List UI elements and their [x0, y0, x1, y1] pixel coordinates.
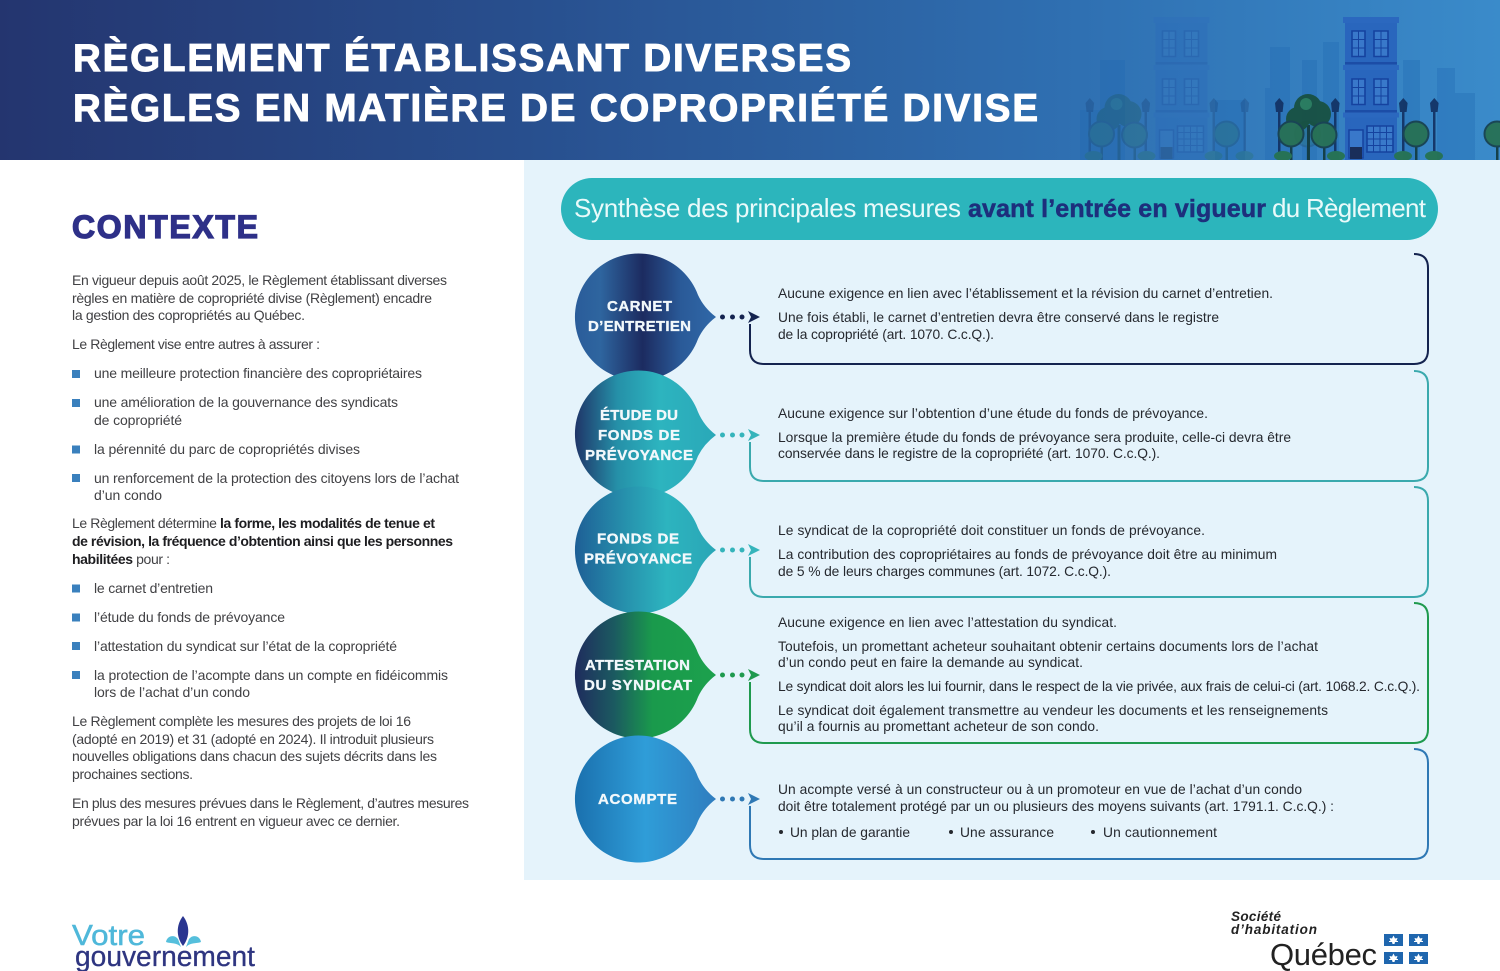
list: documents: l’attestation du syndicat sur l’état de la copropriété — [94, 638, 397, 654]
text: acompte: Un plan de garantie — [790, 825, 910, 840]
list: objectifs — [72, 365, 459, 503]
title: RÈGLEMENT ÉTABLISSANT DIVERSES — [73, 36, 851, 80]
text: carnet d'entretien: de la copropriété (art. 1070. C.c.Q.). — [778, 327, 994, 342]
text: attestation du syndicat: d’un condo peut en faire la demande au syndicat. — [778, 655, 1083, 670]
text: carnet d'entretien: Une fois établi, le carnet d’entretien devra être conservé dans le registre — [778, 310, 1219, 325]
text: attestation du syndicat: Aucune exigence en lien avec l’attestation du syndicat. — [778, 615, 1117, 630]
bubble: fonds de prévoyance: PRÉVOYANCE — [584, 550, 692, 568]
text: acompte: doit être totalement protégé par un ou plusieurs des moyens suivants (art. 1791.1. C.c.Q.) : — [778, 799, 1334, 814]
bubble: étude du fonds de prévoyance: ÉTUDE DU — [600, 407, 678, 424]
text: étude du fonds de prévoyance: conservée dans le registre de la copropriété (art. 1070. C.c.Q.). — [778, 446, 1160, 461]
text block: contexte: habilitées pour : — [72, 551, 170, 567]
bubble: attestation du syndicat — [575, 611, 716, 738]
list: documents: l’étude du fonds de prévoyance — [94, 609, 285, 625]
bubble: étude du fonds de prévoyance: FONDS DE — [598, 427, 680, 444]
bubble: fonds de prévoyance — [575, 486, 716, 614]
box 3 outline — [750, 487, 1428, 597]
skyline illustration — [1080, 17, 1500, 161]
text: attestation du syndicat: Le syndicat doit également transmettre au vendeur les documents et les renseignements — [778, 703, 1328, 718]
text block: contexte: Le Règlement complète les mesures des projets de loi 16 — [72, 713, 411, 729]
bubble: acompte — [575, 736, 716, 862]
icon: québec flag — [1384, 934, 1428, 964]
box 1 outline — [750, 254, 1428, 364]
list: objectifs: d’un condo — [94, 487, 162, 503]
heading pill: avant l’entrée en vigueur — [968, 195, 1266, 223]
text: carnet d'entretien — [778, 286, 1273, 342]
list: objectifs: une meilleure protection financière des copropriétaires — [94, 365, 422, 381]
list: documents: lors de l’achat d’un condo — [94, 684, 250, 700]
list: objectifs: de copropriété — [94, 412, 182, 428]
arrow 5 — [720, 793, 760, 805]
arrow 4 — [720, 669, 760, 681]
text: acompte: Un acompte versé à un constructeur ou à un promoteur en vue de l’achat d’un condo — [778, 782, 1302, 797]
heading: contexte: CONTEXTE — [72, 209, 258, 245]
heading pill — [561, 178, 1438, 240]
logo: votre gouvernement — [72, 916, 255, 971]
text: étude du fonds de prévoyance: Lorsque la première étude du fonds de prévoyance sera produite, celle-ci devra être — [778, 430, 1291, 445]
logo: société d'habitation québec — [1231, 909, 1428, 971]
box 2 outline — [750, 371, 1428, 481]
text block: contexte: la gestion des copropriétés au Québec. — [72, 307, 305, 323]
list: objectifs: un renforcement de la protection des citoyens lors de l’achat — [94, 470, 459, 486]
list: documents: le carnet d’entretien — [94, 580, 213, 596]
logo: société d'habitation québec: d’habitation — [1231, 922, 1317, 937]
text: fonds de prévoyance — [778, 523, 1277, 579]
text: fonds de prévoyance: La contribution des copropriétaires au fonds de prévoyance doit être au minimum — [778, 547, 1277, 562]
text block: contexte: nouvelles obligations dans chacun des sujets décrits dans les — [72, 748, 437, 764]
text: attestation du syndicat: Le syndicat doit alors les lui fournir, dans le respect de la vie privée, aux frais de celui-ci (art. 1068.2. C.c.Q.). — [778, 679, 1420, 694]
text: attestation du syndicat — [778, 615, 1420, 734]
arrow 1 — [720, 311, 760, 323]
text: acompte: Une assurance — [960, 825, 1054, 840]
text block: contexte: En plus des mesures prévues dans le Règlement, d’autres mesures — [72, 795, 469, 811]
text: acompte — [778, 782, 1334, 840]
list: documents: la protection de l’acompte dans un compte en fidéicommis — [94, 667, 448, 683]
text block: contexte — [72, 272, 469, 829]
logo: votre gouvernement: Votre — [72, 920, 145, 952]
text block: contexte: En vigueur depuis août 2025, le Règlement établissant diverses — [72, 272, 447, 288]
logo: société d'habitation québec: Québec — [1270, 937, 1377, 971]
bubble: carnet d'entretien: D’ENTRETIEN — [588, 318, 691, 335]
text block: contexte: prévues par la loi 16 entrent en vigueur avec ce dernier. — [72, 813, 400, 829]
text: acompte: Un cautionnement — [1103, 825, 1217, 840]
text block: contexte: de révision, la fréquence d’obtention ainsi que les personnes — [72, 533, 453, 549]
text block: contexte: (adopté en 2019) et 31 (adopté en 2024). Il introduit plusieurs — [72, 731, 434, 747]
text block: contexte: Le Règlement vise entre autres à assurer : — [72, 336, 320, 352]
bubble: attestation du syndicat: ATTESTATION — [585, 657, 690, 674]
bubble: étude du fonds de prévoyance — [575, 370, 716, 497]
text: fonds de prévoyance: de 5 % de leurs charges communes (art. 1072. C.c.Q.). — [778, 564, 1111, 579]
text: carnet d'entretien: Aucune exigence en lien avec l’établissement et la révision du carnet d’entretien. — [778, 286, 1273, 301]
arrow 3 — [720, 544, 760, 556]
bubble: fonds de prévoyance: FONDS DE — [597, 530, 679, 548]
heading pill: Synthèse des principales mesures — [574, 193, 961, 223]
bubble: carnet d'entretien — [575, 253, 716, 380]
text: attestation du syndicat: Toutefois, un promettant acheteur souhaitant obtenir certains documents lors de l’achat — [778, 639, 1318, 654]
text block: contexte: règles en matière de copropriété divise (Règlement) encadre — [72, 290, 432, 306]
bubble: carnet d'entretien: CARNET — [607, 298, 672, 315]
text: attestation du syndicat: qu’il a fournis au promettant acheteur de son condo. — [778, 719, 1099, 734]
arrow 2 — [720, 429, 760, 441]
heading pill: du Règlement — [1272, 193, 1427, 223]
foreground building and trees — [1274, 17, 1500, 161]
logo: société d'habitation québec: Société — [1231, 909, 1281, 924]
list: documents — [72, 580, 448, 700]
text block: contexte: Le Règlement détermine la forme, les modalités de tenue et — [72, 515, 435, 531]
list: objectifs: une amélioration de la gouvernance des syndicats — [94, 394, 398, 410]
box 4 outline — [750, 603, 1428, 743]
title — [73, 36, 1038, 130]
header banner — [0, 0, 1500, 161]
text block: contexte: prochaines sections. — [72, 766, 193, 782]
box 5 outline — [750, 749, 1428, 859]
text: fonds de prévoyance: Le syndicat de la copropriété doit constituer un fonds de prévoyance. — [778, 523, 1205, 538]
faded building and trees — [1084, 17, 1320, 161]
list: objectifs: la pérennité du parc de copropriétés divises — [94, 441, 360, 457]
text: étude du fonds de prévoyance: Aucune exigence sur l’obtention d’une étude du fonds de prévoyance. — [778, 406, 1208, 421]
right panel background — [524, 160, 1500, 880]
text: étude du fonds de prévoyance — [778, 406, 1291, 461]
icon: fleur-de-lis — [166, 916, 201, 947]
bubble: acompte: ACOMPTE — [598, 791, 677, 808]
bubble: attestation du syndicat: DU SYNDICAT — [584, 677, 692, 694]
title: RÈGLES EN MATIÈRE DE COPROPRIÉTÉ DIVISE — [73, 86, 1038, 130]
bubble: étude du fonds de prévoyance: PRÉVOYANCE — [585, 447, 693, 464]
